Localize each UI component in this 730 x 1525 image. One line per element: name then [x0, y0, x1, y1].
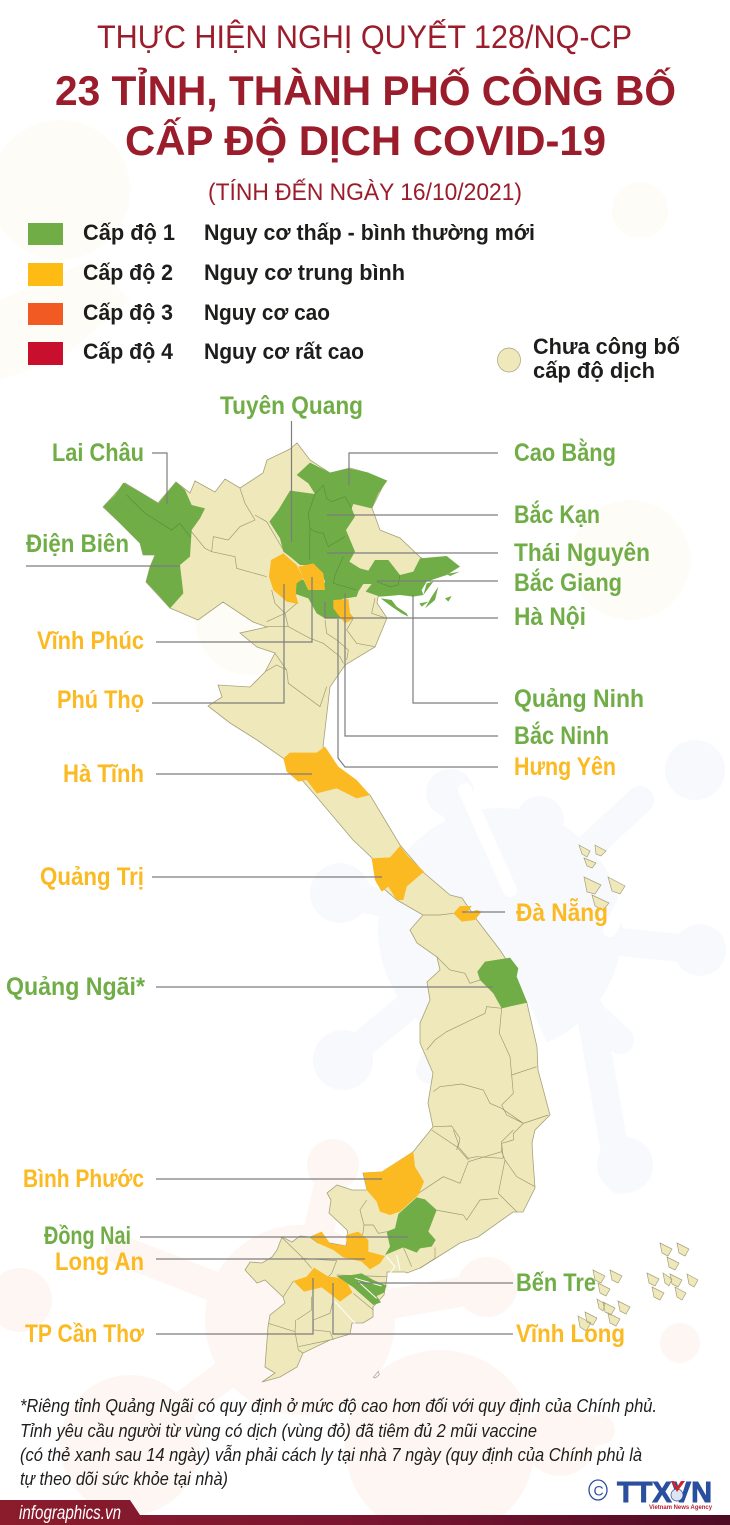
region: Bình Phước	[363, 1152, 424, 1215]
label: Bình Phước: Bình Phước	[23, 1165, 144, 1193]
label: Bắc Giang: Bắc Giang	[514, 567, 622, 597]
legend: level 4	[28, 339, 364, 365]
islands: Quảng Ninh	[381, 572, 460, 617]
region: TP Cần Thơ and Vĩnh Long	[293, 1268, 352, 1302]
legend	[28, 220, 680, 383]
region: Hà Tĩnh	[283, 747, 370, 798]
region: Quảng Ngãi	[477, 958, 527, 1008]
legend: level 3: Cấp độ 3	[83, 300, 173, 325]
footnote	[20, 1396, 657, 1489]
legend: level 3: Nguy cơ cao	[204, 300, 330, 325]
footer: website: infographics.vn	[19, 1503, 121, 1524]
label: Bắc Kạn: Bắc Kạn	[514, 499, 600, 529]
region: Đà Nẵng	[453, 906, 482, 922]
label: Cao Bằng: Cao Bằng	[514, 437, 616, 467]
region: Phú Thọ	[269, 553, 303, 604]
title: line 2: 23 TỈNH, THÀNH PHỐ CÔNG BỐ	[55, 66, 676, 114]
legend: level 2	[28, 260, 405, 286]
region: Đồng Nai	[385, 1197, 437, 1255]
map: northern provinces	[265, 590, 387, 707]
label: Tuyên Quang: Tuyên Quang	[220, 392, 363, 420]
label: Phú Thọ	[57, 584, 284, 714]
region: Hà Nội and Hưng Yên	[333, 599, 354, 623]
map base: country outline	[103, 443, 550, 1382]
label: Bắc Ninh: Bắc Ninh	[514, 720, 609, 750]
label: Điện Biên: Điện Biên	[26, 530, 129, 558]
label: Đồng Nai: Đồng Nai	[44, 1222, 131, 1250]
map: southern provinces	[268, 1152, 437, 1378]
footnote: *Riêng tỉnh Quảng Ngãi có quy định ở mức độ cao hơn đối với quy định của Chính phủ.	[20, 1396, 657, 1416]
label: Thái Nguyên: Thái Nguyên	[514, 539, 650, 567]
label: Hà Tĩnh: Hà Tĩnh	[63, 760, 144, 788]
label: TP Cần Thơ: TP Cần Thơ	[25, 1320, 144, 1348]
subtitle: date: (TÍNH ĐẾN NGÀY 16/10/2021)	[208, 178, 522, 206]
legend: level 1	[28, 220, 535, 245]
label: Phú Thọ: Phú Thọ	[57, 686, 144, 714]
region: Lai Châu and Điện Biên	[103, 482, 205, 608]
label: TP Cần Thơ	[25, 1278, 313, 1348]
legend: level 1: Nguy cơ thấp - bình thường mới	[204, 220, 535, 245]
legend: not announced: Chưa công bố	[533, 334, 680, 359]
logo: TTXVN: TTXVN	[617, 1477, 712, 1509]
map of Vietnam	[103, 443, 698, 1382]
footnote: (có thẻ xanh sau 14 ngày) vẫn phải cách ly tại nhà 7 ngày (quy định của Chính phủ là	[20, 1445, 642, 1465]
label: Vĩnh Long: Vĩnh Long	[516, 1320, 625, 1348]
label: Vĩnh Phúc: Vĩnh Phúc	[37, 627, 144, 655]
label: Bắc Ninh	[345, 593, 609, 750]
map: northwest provinces	[103, 482, 283, 608]
label: Đà Nẵng: Đà Nẵng	[516, 897, 608, 927]
region: Tuyên Quang, Cao Bằng, Bắc Kạn, Thái Nguyên, Bắc Giang, Quảng Ninh, Bắc Ninh	[269, 463, 460, 618]
label: Quảng Ngãi: Quảng Ngãi*	[6, 973, 145, 1001]
label: Hưng Yên: Hưng Yên	[514, 753, 616, 781]
map: central provinces	[372, 846, 548, 1158]
label: Vĩnh Long	[333, 1283, 625, 1348]
map: northeast provinces	[269, 463, 460, 623]
legend: level 4: Cấp độ 4	[83, 339, 174, 364]
label: Hà Nội	[325, 602, 586, 631]
legend: level 1: Cấp độ 1	[83, 220, 175, 245]
footnote: tự theo dõi sức khỏe tại nhà)	[20, 1469, 228, 1489]
legend: level 3	[28, 300, 330, 325]
region: Long An	[310, 1232, 385, 1269]
legend: level 2: Nguy cơ trung bình	[204, 260, 405, 285]
region: Vĩnh Phúc	[298, 563, 325, 590]
label: Quảng Ninh	[413, 595, 644, 713]
legend: level 2: Cấp độ 2	[83, 260, 173, 285]
map: north central	[283, 747, 370, 798]
label: Quảng Trị: Quảng Trị	[40, 863, 144, 891]
label: Hà Nội: Hà Nội	[514, 603, 586, 631]
label: Cao Bằng	[349, 437, 616, 485]
title: line 3: CẤP ĐỘ DỊCH COVID-19	[125, 116, 606, 164]
islands: Trường Sa	[578, 1243, 698, 1331]
label: Bến Tre: Bến Tre	[516, 1269, 596, 1297]
logo: TTXVN: Vietnam News Agency	[649, 1504, 712, 1511]
label: Lai Châu: Lai Châu	[52, 439, 144, 467]
label: Long An: Long An	[55, 1248, 144, 1276]
label: Lai Châu	[52, 439, 167, 504]
label: Vĩnh Phúc	[37, 577, 312, 655]
legend: not announced: cấp độ dịch	[533, 358, 655, 383]
region: Bến Tre	[337, 1273, 387, 1305]
label: Quảng Ninh: Quảng Ninh	[514, 685, 644, 713]
footnote: Tỉnh yêu cầu người từ vùng có dịch (vùng đỏ) đã tiêm đủ 2 mũi vaccine	[20, 1421, 537, 1441]
label: Hưng Yên	[338, 619, 616, 781]
region: Quảng Trị	[372, 846, 424, 900]
title: line 1: THỰC HIỆN NGHỊ QUYẾT 128/NQ-CP	[97, 19, 632, 55]
logo: TTXVN: C	[594, 1482, 604, 1498]
legend: level 4: Nguy cơ rất cao	[204, 339, 364, 364]
map: southeast inland	[418, 1130, 535, 1220]
islands: Hoàng Sa	[579, 845, 625, 910]
footer bar	[0, 1500, 730, 1525]
legend: not announced	[498, 334, 680, 383]
